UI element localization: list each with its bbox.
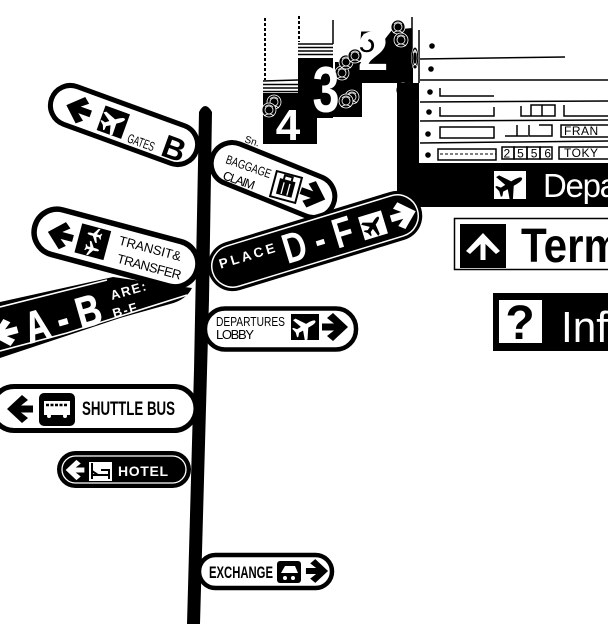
baggage label: CLAIM — [221, 169, 257, 193]
shuttle label: SHUTTLE BUS — [82, 399, 175, 420]
floor numbers — [276, 20, 388, 150]
icon: left arrow — [7, 395, 33, 423]
sign: departures lobby — [205, 308, 356, 350]
icon: bed — [89, 462, 112, 481]
dotted guide lines — [265, 16, 419, 84]
transit label: TRANSFER — [115, 251, 183, 283]
icon: departures plane — [491, 166, 529, 204]
icon: left arrow — [66, 460, 84, 480]
transit label: TRANSIT& — [117, 233, 183, 264]
icon: transfer planes — [74, 223, 111, 260]
sign: gates B — [44, 80, 203, 173]
icon: plane — [289, 311, 321, 343]
gate range label: A - B — [19, 285, 107, 353]
baggage label — [221, 153, 273, 193]
icon: left arrow — [0, 316, 21, 350]
icon: currency — [277, 561, 301, 583]
sign: shuttle bus — [0, 386, 196, 430]
icon: bus — [39, 393, 75, 426]
board frame — [397, 83, 608, 207]
exchange label: EXCHANGE — [209, 563, 273, 582]
gates label: GATES — [125, 131, 157, 154]
icon: right arrow — [387, 198, 420, 232]
small note: Sn. — [243, 134, 261, 149]
sign: place D-F black — [202, 185, 428, 297]
terminal sign — [454, 218, 608, 273]
icon: left arrow — [44, 218, 77, 252]
sign: hotel — [57, 451, 191, 488]
icon: question mark: ? — [505, 297, 535, 350]
area label — [109, 278, 149, 321]
sign: exchange — [199, 555, 332, 588]
step blocks — [263, 28, 413, 144]
area label: B-F — [111, 299, 140, 321]
icon: luggage — [270, 171, 302, 203]
floor numbers: 5 — [359, 26, 375, 59]
board labels: 2556 — [504, 146, 552, 160]
lobby label — [216, 314, 285, 342]
sign: transit and transfer — [29, 204, 203, 292]
board rows — [420, 57, 608, 160]
scribbled clouds — [262, 20, 418, 117]
floor numbers: 4 — [276, 101, 301, 150]
flight departures board — [397, 43, 608, 207]
icon: plane — [355, 207, 391, 243]
gate letter: B — [157, 128, 191, 169]
transit label — [113, 233, 188, 283]
icon: left arrow — [62, 92, 96, 127]
board labels: FRAN — [564, 124, 599, 138]
sign: baggage claim — [205, 136, 341, 224]
step stripes — [263, 44, 333, 92]
information sign — [493, 293, 608, 352]
floor numbers: 2 — [358, 20, 388, 82]
lobby label: DEPARTURES — [216, 314, 285, 329]
baggage label: BAGGAGE — [224, 153, 273, 181]
icon: right arrow — [306, 559, 328, 583]
icon: right arrow — [296, 177, 330, 213]
area label: ARE: — [109, 278, 149, 303]
icon: right arrow — [322, 313, 348, 341]
signpost pole — [187, 106, 212, 624]
row bullets — [425, 43, 435, 158]
lobby label: LOBBY — [216, 327, 254, 342]
icon: plane — [92, 101, 135, 144]
place label: PLACE — [217, 240, 280, 272]
gate range label: D - F — [276, 207, 359, 273]
icon: up arrow — [460, 224, 506, 268]
hotel label: HOTEL — [118, 463, 168, 479]
board labels — [504, 124, 599, 160]
sign: A-B black band — [0, 277, 192, 358]
floor numbers: 3 — [312, 53, 340, 126]
board labels: TOKY — [564, 146, 598, 160]
stepped building illustration — [262, 16, 419, 150]
